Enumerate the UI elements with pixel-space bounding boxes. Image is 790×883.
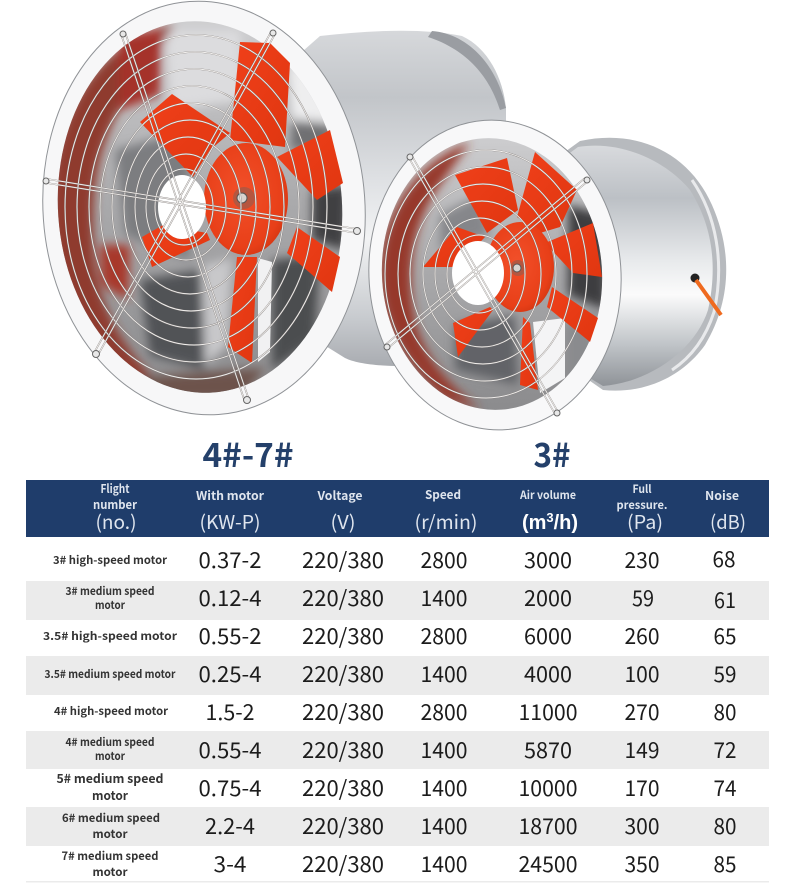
row: 4# medium speed motor: motor xyxy=(95,748,125,764)
row: 6# medium speed motor: 80 xyxy=(714,810,736,841)
row: 3.5# high-speed motor: 260 xyxy=(624,620,660,651)
row: 3# high-speed motor: 2800 xyxy=(420,544,468,575)
header: voltage: (V) xyxy=(330,508,356,535)
row: 6# medium speed motor: 2.2-4 xyxy=(205,810,255,841)
small fan guard bolts xyxy=(384,154,590,416)
small fan flange highlight xyxy=(672,180,719,370)
row: 4# high-speed motor: 270 xyxy=(624,696,660,727)
row: 4# high-speed motor: 4# high-speed motor xyxy=(54,703,168,719)
row: 7# medium speed motor: 24500 xyxy=(518,848,578,879)
header: air volume: (m xyxy=(522,512,546,534)
row: 7# medium speed motor: 85 xyxy=(714,848,736,879)
header: speed xyxy=(414,486,478,535)
header: full pressure: Full xyxy=(632,481,652,497)
row: 4# high-speed motor: 80 xyxy=(714,696,736,727)
row: 5# medium speed motor: 1400 xyxy=(420,772,468,803)
row: 3# medium speed motor: motor xyxy=(95,597,125,613)
large fan blades xyxy=(140,42,343,363)
row: 5# medium speed motor: motor xyxy=(92,785,129,804)
table header xyxy=(26,480,769,537)
row: 3.5# high-speed motor: 220/380 xyxy=(302,620,384,651)
small fan hub bolt xyxy=(510,260,526,276)
row: 4# medium speed motor: 5870 xyxy=(524,734,572,765)
row: 5# medium speed motor: 5# medium speed xyxy=(56,768,164,787)
small fan wire guard xyxy=(385,150,588,414)
row: 6# medium speed motor: motor xyxy=(92,826,128,842)
row: 4# medium speed motor: 4# medium speed xyxy=(66,734,154,750)
large fan outer ring xyxy=(29,0,379,426)
row: 3# medium speed motor xyxy=(66,582,736,615)
row: 3# high-speed motor: 3000 xyxy=(524,544,572,575)
row: 3# high-speed motor: 0.37-2 xyxy=(198,544,262,575)
row: 7# medium speed motor: 220/380 xyxy=(302,848,384,879)
row: 3# medium speed motor: 0.12-4 xyxy=(198,582,262,613)
alternating row backgrounds xyxy=(26,581,769,882)
row: 3# medium speed motor: 2000 xyxy=(524,582,572,613)
row: 4# medium speed motor: 149 xyxy=(624,734,660,765)
row: 3# high-speed motor: 3# high-speed motor xyxy=(53,552,167,568)
header: with motor xyxy=(196,487,265,535)
row: 3# medium speed motor: 59 xyxy=(632,582,654,613)
row: 3.5# medium speed motor: 3.5# medium speed motor xyxy=(44,666,176,682)
row: 3.5# medium speed motor: 100 xyxy=(624,658,660,689)
header: flight number: (no.) xyxy=(96,508,136,535)
row: 6# medium speed motor: 300 xyxy=(624,810,660,841)
row: 4# high-speed motor xyxy=(54,696,736,727)
small fan interior xyxy=(382,138,602,410)
large fan wire guard xyxy=(47,32,357,402)
row: 6# medium speed motor: 1400 xyxy=(420,810,468,841)
header: air volume: /h) xyxy=(554,512,578,534)
row: 3# high-speed motor: 68 xyxy=(712,543,736,574)
row: 5# medium speed motor xyxy=(56,768,737,804)
small fan power cable xyxy=(690,274,721,315)
large fan interior xyxy=(50,15,350,400)
row: 3.5# high-speed motor: 2800 xyxy=(420,620,468,651)
row: 5# medium speed motor: 220/380 xyxy=(302,772,384,803)
row: 4# high-speed motor: 220/380 xyxy=(302,696,384,727)
large fan duct xyxy=(270,31,506,366)
label: 3#: 3# xyxy=(534,429,570,477)
row: 6# medium speed motor: 18700 xyxy=(518,810,578,841)
small fan centre opening xyxy=(452,241,504,305)
large fan hub bolt xyxy=(233,187,255,209)
row: 3.5# medium speed motor: 220/380 xyxy=(302,658,384,689)
row: 4# medium speed motor: 72 xyxy=(714,734,736,765)
large fan centre opening xyxy=(158,175,206,239)
row: 3# medium speed motor: 220/380 xyxy=(302,582,384,613)
row: 3# medium speed motor: 61 xyxy=(714,584,736,615)
row: 3.5# high-speed motor xyxy=(43,620,736,651)
row: 5# medium speed motor: 0.75-4 xyxy=(198,772,262,803)
large fan rear flange xyxy=(428,31,506,110)
row: 6# medium speed motor: 220/380 xyxy=(302,810,384,841)
row: 6# medium speed motor xyxy=(62,810,736,842)
row: 4# medium speed motor: 220/380 xyxy=(302,734,384,765)
row: 3.5# medium speed motor: 4000 xyxy=(524,658,572,689)
header: air volume xyxy=(519,487,578,534)
small fan hub xyxy=(486,222,554,312)
row: 7# medium speed motor: motor xyxy=(92,864,128,880)
row: 4# high-speed motor: 1.5-2 xyxy=(206,696,254,727)
header: with motor: (KW-P) xyxy=(200,508,260,535)
row: 5# medium speed motor: 74 xyxy=(714,772,737,803)
header: with motor: With motor xyxy=(196,487,265,504)
row: 4# medium speed motor: 0.55-4 xyxy=(198,734,262,765)
small fan 3# xyxy=(358,112,726,438)
row: 7# medium speed motor: 350 xyxy=(624,848,660,879)
row: 5# medium speed motor: 170 xyxy=(624,772,660,803)
row: 3.5# medium speed motor xyxy=(44,658,736,689)
large fan guard bolts xyxy=(43,30,360,404)
row: 7# medium speed motor xyxy=(62,848,736,880)
header: speed: Speed xyxy=(425,486,461,503)
row: 3# high-speed motor: 220/380 xyxy=(302,544,384,575)
small fan duct xyxy=(540,146,713,386)
row: 3# high-speed motor xyxy=(53,543,736,575)
header: flight number xyxy=(93,480,138,535)
row: 7# medium speed motor: 3-4 xyxy=(214,848,247,879)
row: 3# medium speed motor: 1400 xyxy=(420,582,468,613)
row: 3.5# medium speed motor: 1400 xyxy=(420,658,468,689)
small fan rear flange xyxy=(540,138,726,391)
header: voltage xyxy=(316,487,363,535)
row: 4# medium speed motor: 1400 xyxy=(420,734,468,765)
header: air volume: Air volume xyxy=(519,487,576,503)
large fan hub xyxy=(204,143,288,255)
row: 3# high-speed motor: 230 xyxy=(624,544,660,575)
header: flight number: Flight xyxy=(100,480,130,497)
large fan 4#-7# xyxy=(29,0,506,426)
row: 3.5# high-speed motor: 65 xyxy=(714,620,736,651)
row: 7# medium speed motor: 7# medium speed xyxy=(62,848,158,864)
header: full pressure: pressure. xyxy=(616,497,668,513)
row: 4# high-speed motor: 2800 xyxy=(420,696,468,727)
small fan blades xyxy=(423,152,602,390)
row: 7# medium speed motor: 1400 xyxy=(420,848,468,879)
label: 4#-7#: 4#-7# xyxy=(202,429,294,477)
row: 4# high-speed motor: 11000 xyxy=(518,696,578,727)
row: 3.5# high-speed motor: 3.5# high-speed motor xyxy=(43,628,177,644)
header: voltage: Voltage xyxy=(316,487,363,504)
header: noise: Noise xyxy=(705,487,739,504)
row: 3.5# medium speed motor: 59 xyxy=(714,658,736,689)
small fan outer ring xyxy=(358,112,632,438)
row: 5# medium speed motor: 10000 xyxy=(518,772,578,803)
row: 3.5# high-speed motor: 0.55-2 xyxy=(198,620,262,651)
row: 3.5# medium speed motor: 0.25-4 xyxy=(198,658,262,689)
row: 6# medium speed motor: 6# medium speed xyxy=(62,810,160,826)
header: noise: (dB) xyxy=(710,508,746,535)
row: 3# medium speed motor: 3# medium speed xyxy=(66,583,154,599)
header: flight number: number xyxy=(93,496,138,513)
header: noise xyxy=(705,487,746,535)
header: full pressure xyxy=(616,481,668,535)
header: air volume: 3 xyxy=(546,510,554,525)
header: speed: (r/min) xyxy=(414,508,478,535)
row: 4# medium speed motor xyxy=(66,734,736,765)
header: full pressure: (Pa) xyxy=(627,508,663,535)
row: 3.5# high-speed motor: 6000 xyxy=(524,620,572,651)
